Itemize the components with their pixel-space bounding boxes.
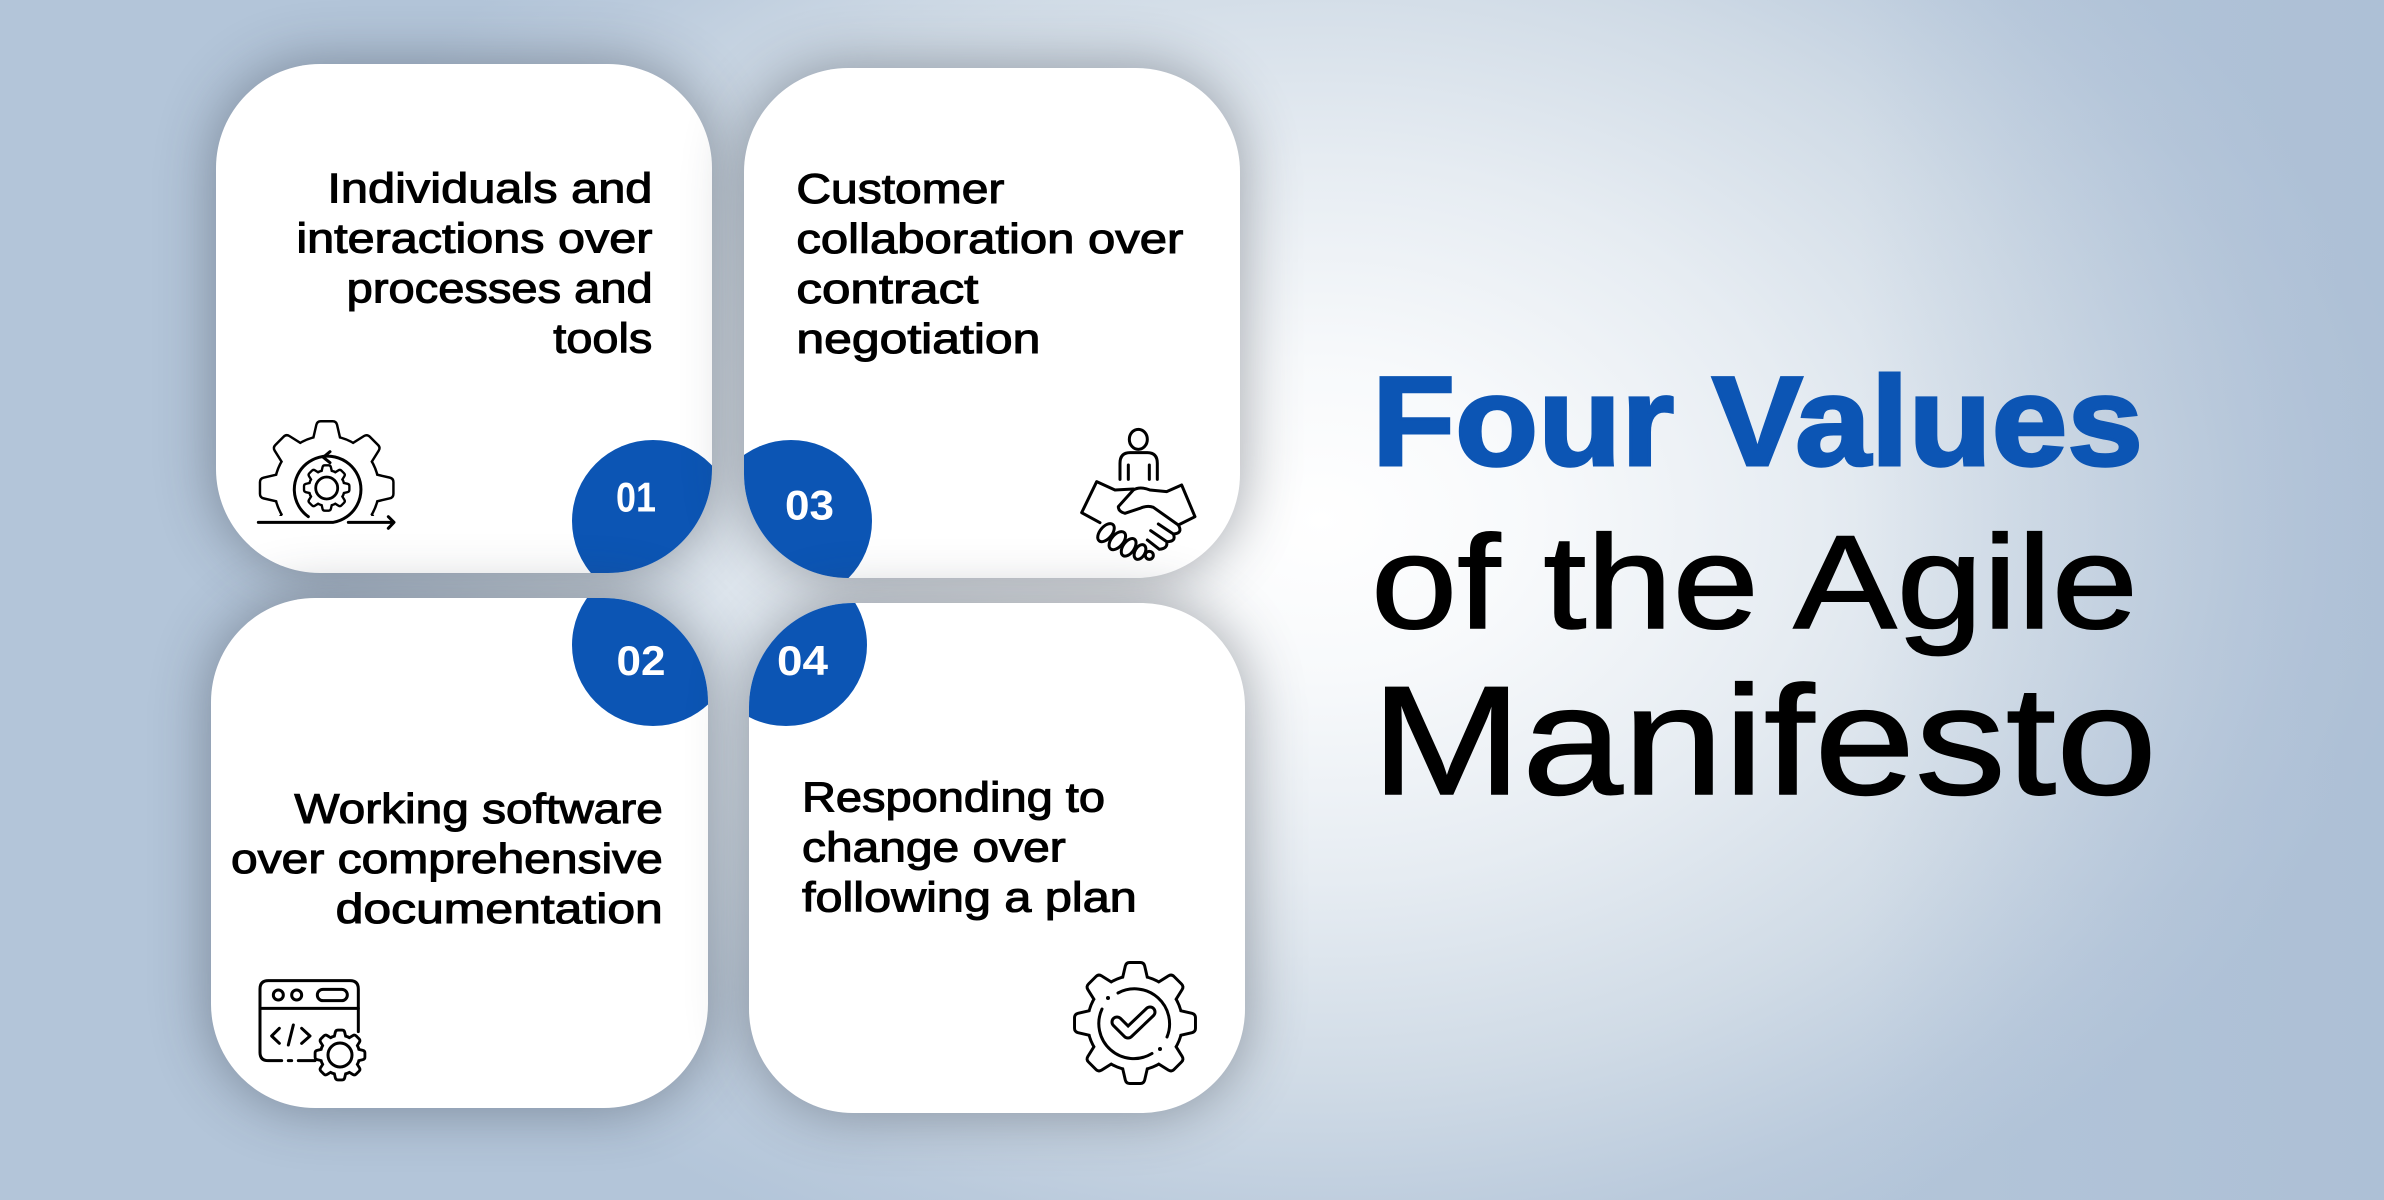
- panel: card 01 individuals and interactions: [216, 64, 712, 573]
- card 03 text: collaboration over: [796, 215, 1183, 262]
- card 04 text: [802, 773, 1137, 920]
- card 02 text: documentation: [336, 885, 663, 932]
- card 02 text: [231, 785, 663, 932]
- card 03 text: contract: [796, 265, 979, 312]
- icon: gear with check mark: [1076, 964, 1194, 1082]
- card 04 text: following a plan: [802, 873, 1137, 920]
- number badge 04: 04: [777, 637, 829, 684]
- title: Four Values: [1372, 350, 2143, 492]
- card 04 text: Responding to: [802, 773, 1105, 820]
- number badge 02: [572, 564, 734, 726]
- icon: gear with iteration arrow: [250, 422, 404, 566]
- number badge 03: [710, 440, 872, 602]
- card 01 text: processes and: [347, 264, 653, 312]
- card 01 text: [296, 164, 653, 362]
- card 01 text: interactions over: [296, 214, 652, 262]
- title: of the Agile: [1371, 509, 2138, 657]
- panel: card 02 working software: [211, 598, 708, 1108]
- number badge 01: [572, 440, 734, 602]
- card 04 text: change over: [802, 823, 1066, 870]
- number badge 04: [705, 564, 867, 726]
- icon: code window with gear: [260, 981, 364, 1078]
- card 03 text: negotiation: [796, 315, 1040, 362]
- panel: card 04 responding to change: [749, 603, 1245, 1113]
- card 02 text: Working software: [294, 785, 663, 832]
- card 01 text: Individuals and: [327, 164, 652, 212]
- card 01 text: tools: [553, 314, 652, 362]
- number badge 02: 02: [616, 637, 666, 684]
- number badge 03: 03: [785, 482, 834, 528]
- icon: person over handshake: [1082, 429, 1195, 561]
- title: Manifesto: [1371, 654, 2157, 827]
- card 03 text: [796, 165, 1183, 362]
- panel: card 03 customer collaboration: [744, 68, 1240, 578]
- number badge 01: 01: [616, 474, 656, 520]
- card 03 text: Customer: [796, 165, 1004, 212]
- card 02 text: over comprehensive: [231, 835, 663, 882]
